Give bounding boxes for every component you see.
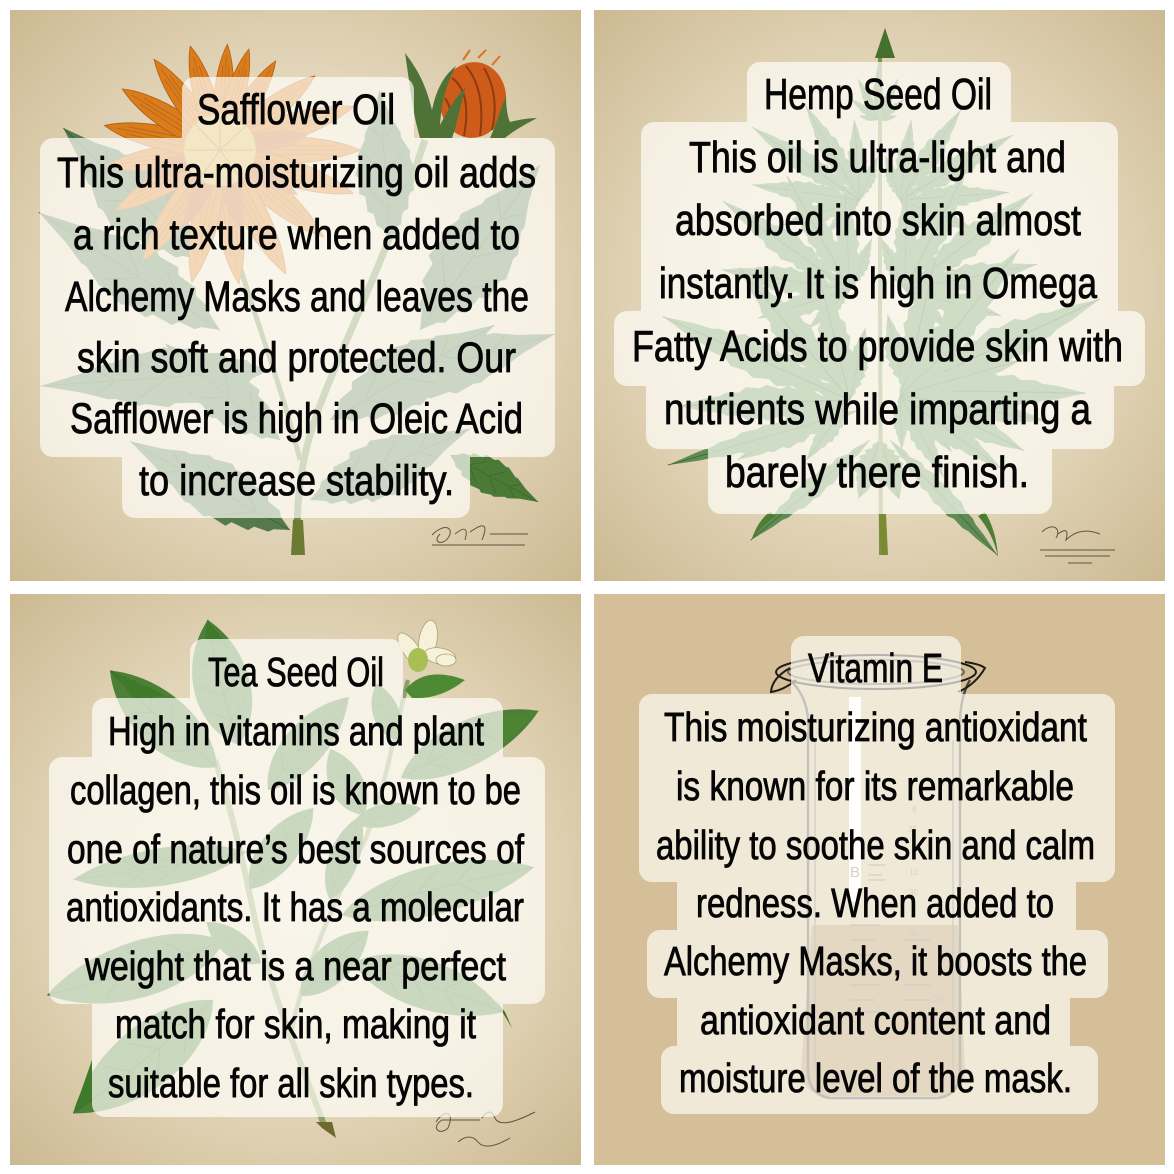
signature — [1040, 527, 1115, 563]
text: tea seed description: match for skin, making it — [115, 1001, 476, 1047]
panel: tea seed oil — [10, 594, 581, 1165]
text: vitamin e description — [656, 645, 1095, 1101]
text: hemp description — [632, 70, 1123, 497]
illustration: glass beaker: B — [850, 864, 860, 881]
text: safflower description: a rich texture when added to — [73, 211, 520, 259]
text: hemp description: barely there finish. — [725, 448, 1029, 497]
text: safflower description: This ultra-moisturizing oil adds — [57, 149, 536, 197]
text: vitamin e description: is known for its remarkable — [676, 763, 1074, 809]
text: vitamin e description: This moisturizing antioxidant — [664, 704, 1087, 750]
text: vitamin e description: Vitamin E — [808, 645, 943, 691]
text: safflower description: Safflower Oil — [197, 86, 395, 134]
text highlight boxes — [40, 77, 555, 518]
illustration: tea branch — [40, 614, 548, 1139]
signature — [432, 526, 528, 545]
illustration: hemp plant — [618, 28, 1149, 563]
text: vitamin e description: redness. When added to — [696, 880, 1054, 926]
beaker rim — [771, 655, 985, 692]
text: safflower description: to increase stability. — [139, 457, 454, 505]
signature — [436, 1112, 535, 1146]
panel: hemp seed oil — [594, 10, 1165, 581]
beaker graduations — [850, 865, 930, 1012]
text: tea seed description — [66, 649, 524, 1106]
panel: safflower oil — [10, 10, 581, 581]
text: tea seed description: weight that is a near perfect — [84, 943, 507, 989]
text: safflower description: Safflower is high in Oleic Acid — [70, 395, 523, 443]
text: tea seed description: High in vitamins and plant — [108, 708, 484, 754]
text: safflower description: skin soft and protected. Our — [77, 334, 516, 382]
text: tea seed description: antioxidants. It has a molecular — [66, 884, 524, 930]
illustration: glass beaker — [771, 655, 985, 1098]
illustration: glass beaker: 30 — [934, 995, 943, 1004]
text: tea seed description: collagen, this oil is known to be — [70, 767, 521, 813]
text highlight boxes — [639, 636, 1115, 1114]
bud — [405, 50, 537, 142]
illustration: glass beaker: 9 — [912, 805, 917, 814]
text: hemp description: absorbed into skin almost — [675, 196, 1081, 245]
hemp top bud — [875, 28, 895, 58]
illustration: glass beaker: 60 — [909, 929, 918, 938]
text: tea seed description: Tea Seed Oil — [208, 649, 384, 695]
illustration: glass beaker: 10 — [909, 868, 918, 877]
flower head — [102, 43, 360, 286]
illustration: glass beaker: 35 — [908, 825, 917, 834]
text: tea seed description: one of nature’s best sources of — [67, 826, 524, 872]
illustration: glass beaker: 30 — [909, 888, 918, 897]
text: hemp description: nutrients while imparting a — [664, 385, 1091, 434]
text: hemp description: This oil is ultra-light and — [689, 133, 1066, 182]
text: vitamin e description: antioxidant content and — [700, 997, 1051, 1043]
text: safflower description: Alchemy Masks and leaves the — [65, 273, 529, 321]
tea flower — [393, 619, 465, 698]
text highlight boxes — [614, 62, 1145, 514]
panel: vitamin e — [594, 594, 1165, 1165]
text: tea seed description: suitable for all skin types. — [108, 1060, 474, 1106]
text: vitamin e description: moisture level of the mask. — [679, 1055, 1072, 1101]
text highlight boxes — [49, 639, 545, 1117]
illustration: safflower plant — [21, 43, 572, 556]
text: hemp description: Hemp Seed Oil — [764, 70, 992, 119]
text: safflower description — [57, 86, 536, 505]
